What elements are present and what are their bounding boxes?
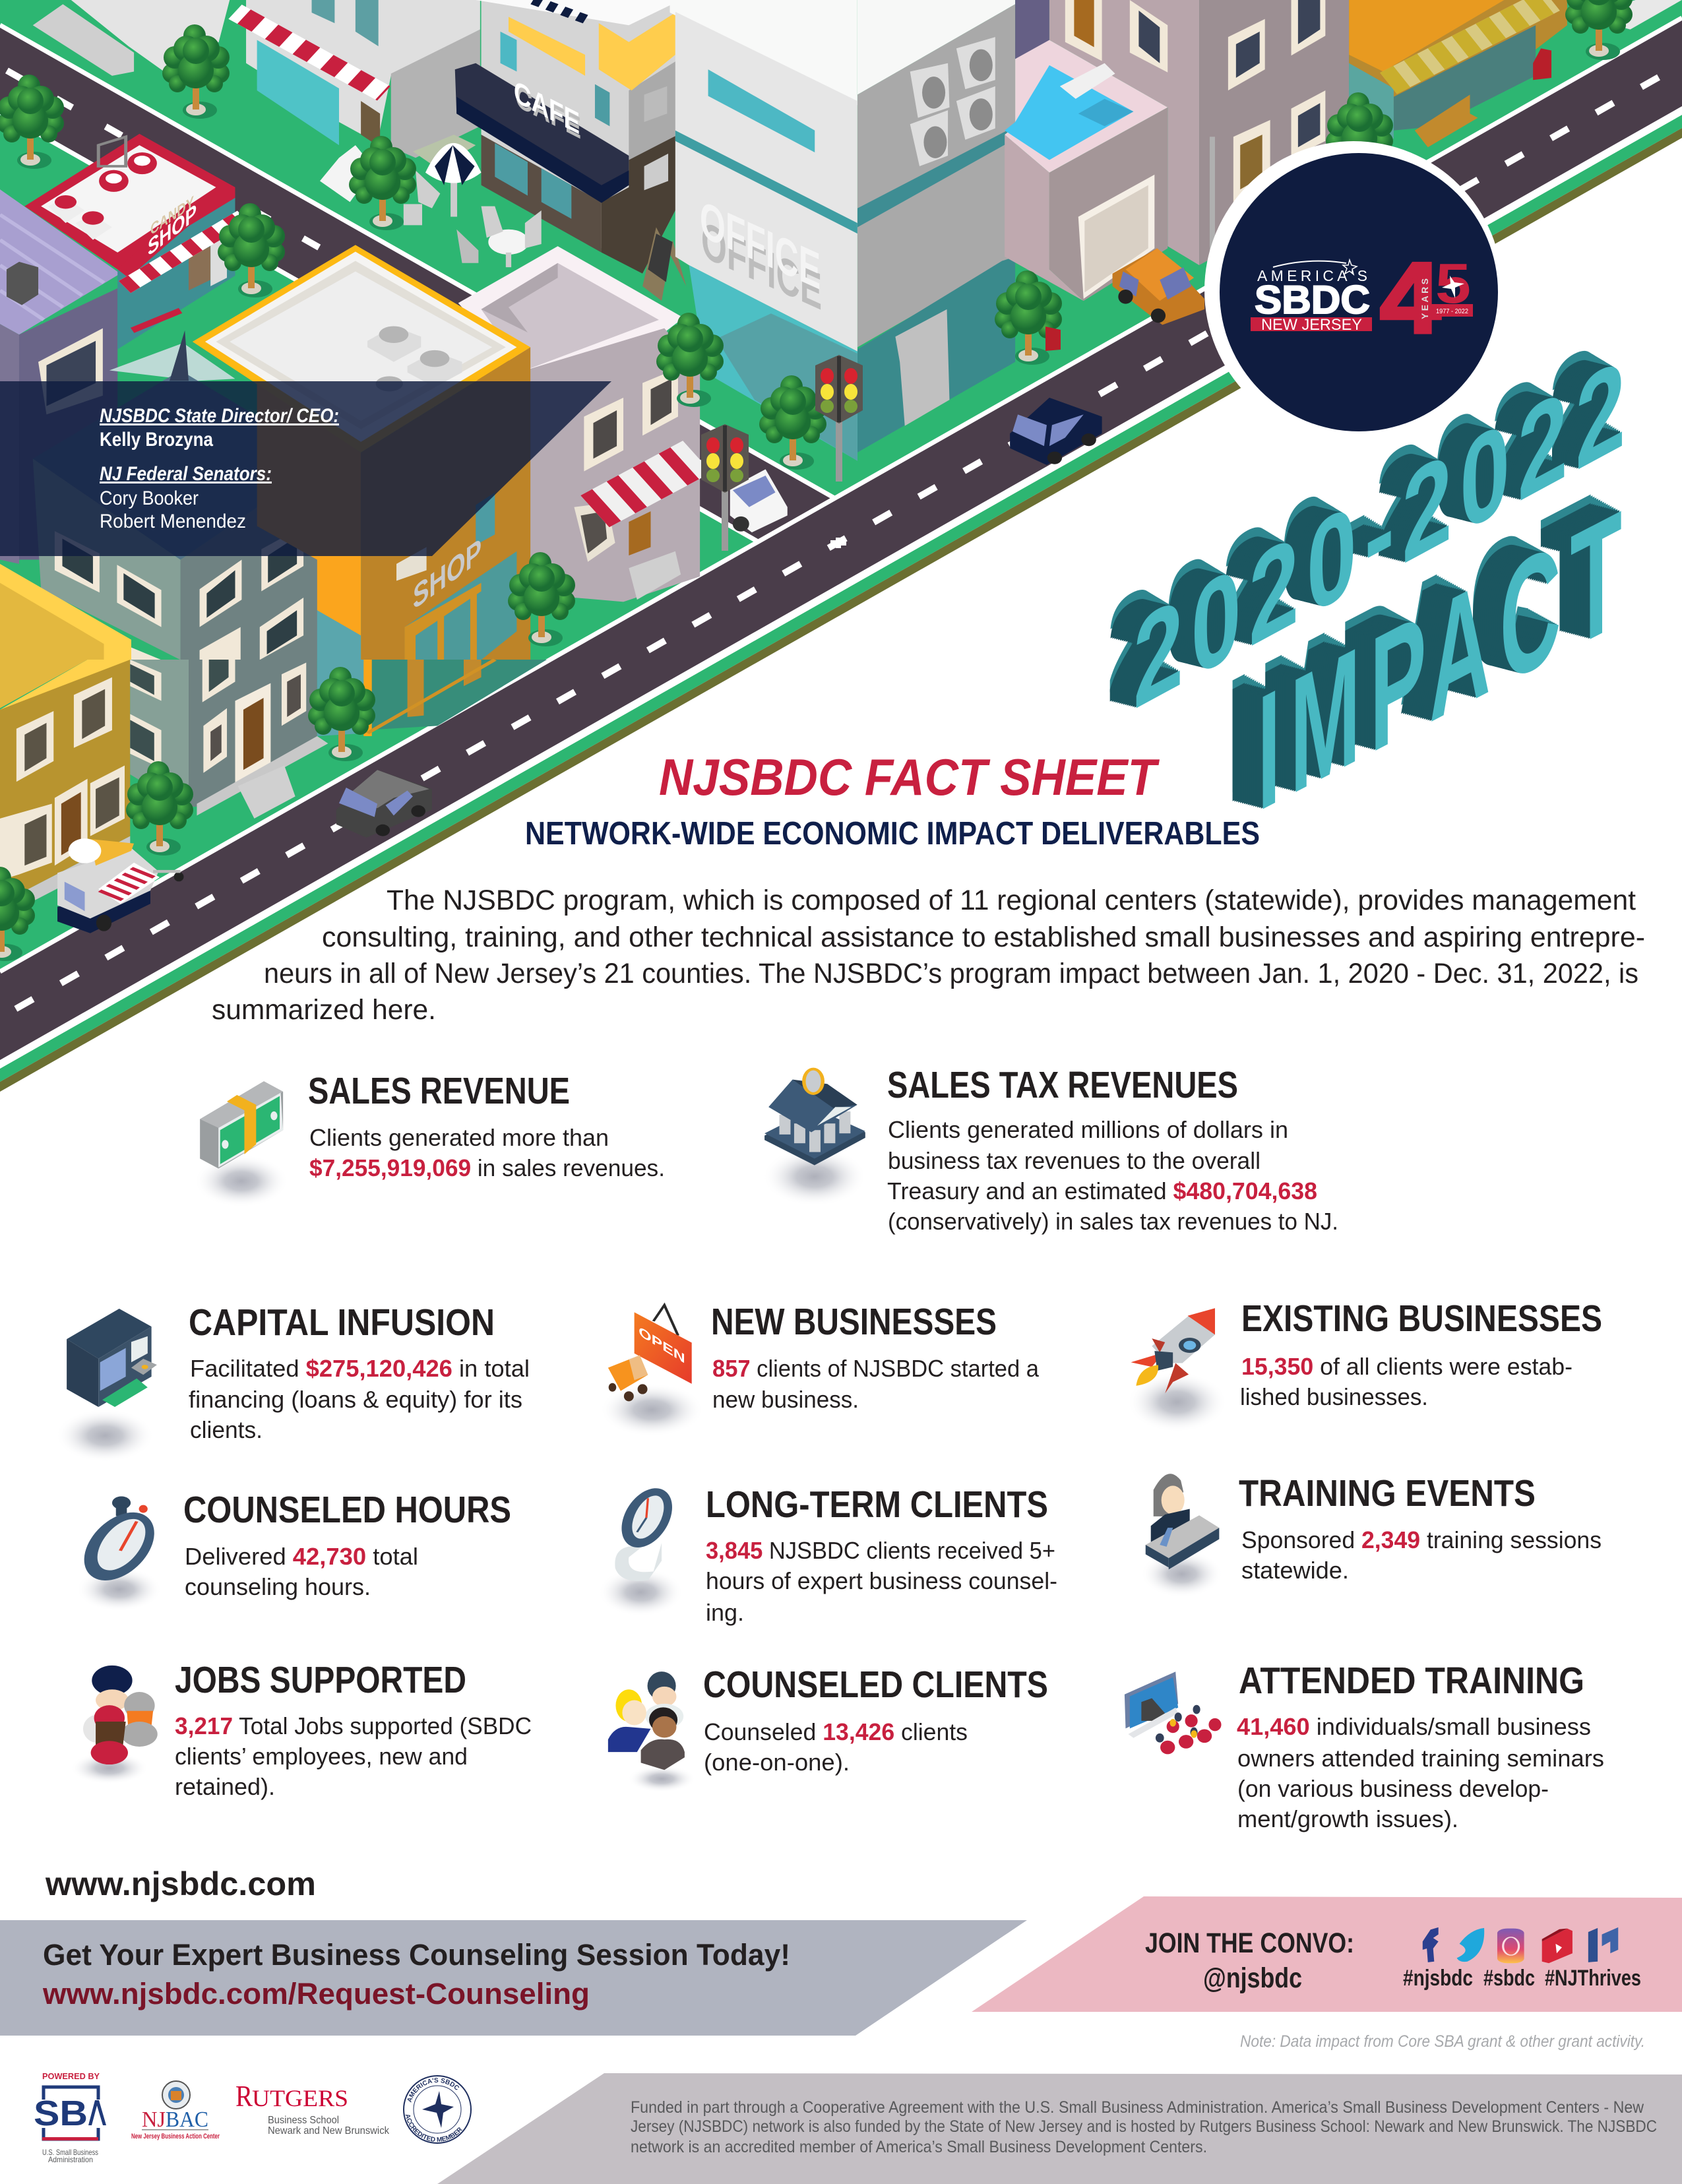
stat: sales tax revenues — [763, 1064, 1338, 1235]
icon: open sign and cart: OPEN — [639, 1323, 685, 1367]
stat: long-term clients: ing. — [706, 1599, 744, 1626]
logo: SBA: U.S. Small Business — [42, 2148, 98, 2157]
logo: Rutgers: UTGERS — [252, 2085, 348, 2111]
stat: counseled hours: counseling hours. — [185, 1573, 371, 1600]
stat: jobs supported: 3,217 Total Jobs supported (SBDC — [175, 1712, 532, 1739]
body: $7,255,919,069 in sales revenues. — [309, 1154, 665, 1181]
stat: counseled clients: Counseled 13,426 clients — [704, 1718, 968, 1745]
banner: request counseling: www.njsbdc.com/Request-Counseling — [42, 1977, 590, 2011]
stat: capital infusion: Facilitated $275,120,426 in total — [190, 1355, 530, 1382]
stat: counseled clients — [703, 1664, 1048, 1776]
3D heading: 2020-2022: 2020-2022 — [1133, 327, 1633, 737]
intro paragraph: summarized here. — [212, 994, 436, 1026]
body: Treasury and an estimated $480,704,638 — [887, 1177, 1317, 1204]
icon: stack of cash — [194, 1081, 288, 1207]
yellow building facade — [0, 660, 130, 914]
subtitle: NETWORK-WIDE ECONOMIC IMPACT DELIVERABLES — [525, 816, 1260, 852]
logo: NJBAC: New Jersey Business Action Center — [131, 2133, 220, 2140]
office side wall — [857, 0, 1015, 452]
banner: join the convo: #sbdc — [1483, 1966, 1535, 1991]
logo: America's SBDC New Jersey 45 years badge: 4 — [1380, 242, 1441, 354]
stat: attended training: ment/growth issues). — [1237, 1805, 1458, 1832]
building signs: OFFICE — [701, 210, 822, 322]
buildings traced lower-left (scaled coordinates) — [0, 660, 547, 933]
banner: join the convo: #NJThrives — [1545, 1966, 1641, 1991]
logo: accredited member seal — [403, 2075, 472, 2144]
banner: request counseling — [0, 1920, 1027, 2036]
building signs: OFFICE — [700, 189, 821, 301]
stat: jobs supported: JOBS SUPPORTED — [175, 1659, 466, 1701]
logo: America's SBDC New Jersey 45 years badge: YEARS — [1419, 278, 1430, 319]
traffic lights — [701, 355, 863, 551]
stat: training events: Sponsored 2,349 training sessions — [1241, 1526, 1602, 1553]
building signs: SHOP — [413, 530, 482, 617]
dark car — [336, 770, 432, 838]
stat: capital infusion — [189, 1301, 530, 1443]
heading: SALES TAX REVENUES — [887, 1064, 1238, 1106]
banner: join the convo: JOIN THE CONVO: — [1145, 1927, 1354, 1959]
intro paragraph: The NJSBDC program, which is composed of 11 regional centers (statewide), provides management — [387, 885, 1636, 916]
ground: green blocks — [0, 0, 1682, 972]
stat: new businesses: 857 clients of NJSBDC started a — [712, 1355, 1040, 1382]
stat: attended training — [1237, 1660, 1604, 1832]
logo: Rutgers — [235, 2079, 390, 2137]
icon: clock with arrow — [598, 1485, 683, 1617]
isometric city illustration — [0, 0, 1682, 1092]
stat: new businesses: NEW BUSINESSES — [711, 1301, 997, 1343]
intro paragraph — [212, 885, 1645, 1026]
road: main diagonal road with kerbs — [0, 18, 1682, 1092]
stat: long-term clients: LONG-TERM CLIENTS — [706, 1483, 1048, 1526]
panel: funding statement — [437, 2073, 1682, 2184]
building signs: CAFE — [514, 75, 580, 141]
banner: request counseling: Get Your Expert Business Counseling Session Today! — [43, 1938, 790, 1972]
stat: existing businesses: lished businesses. — [1240, 1383, 1428, 1410]
logo: America's SBDC New Jersey 45 years badge — [1204, 141, 1503, 439]
panel: funding statement: network is an accredited member of America’s Small Business Development Centers. — [631, 2138, 1207, 2156]
logo: Rutgers: R — [235, 2079, 253, 2113]
panel: leadership overlay: Kelly Brozyna — [100, 429, 213, 451]
3D heading: IMPACT: IMPACT — [1257, 471, 1631, 847]
icon: trainer at podium — [1141, 1474, 1223, 1598]
stat: training events: statewide. — [1241, 1557, 1349, 1584]
building signs: CAFE — [515, 79, 581, 146]
panel: leadership overlay: Robert Menendez — [100, 511, 246, 532]
logo: America's SBDC New Jersey 45 years badge: AMERICA'S — [1257, 267, 1367, 284]
cafe building — [455, 0, 686, 301]
logo: SBA: POWERED BY — [42, 2071, 100, 2081]
candy shop — [24, 134, 243, 350]
stat: new businesses — [711, 1301, 1040, 1413]
buildings traced upper-right (scaled coordinates) — [857, 0, 1682, 465]
street trees — [0, 0, 1633, 961]
purple building — [0, 189, 120, 564]
stat: jobs supported: clients’ employees, new and — [175, 1743, 468, 1770]
banner: join the convo: @njsbdc — [1203, 1962, 1302, 1994]
stat: existing businesses: EXISTING BUSINESSES — [1241, 1297, 1602, 1340]
stat: jobs supported: retained). — [175, 1773, 275, 1800]
yellow building roof — [0, 564, 131, 660]
orange building with yellow awning — [1349, 0, 1682, 147]
patio with parasol and chairs — [404, 135, 542, 267]
stat: counseled clients: (one-on-one). — [704, 1749, 850, 1776]
logo: accredited member seal: ACCREDITED MEMBER — [405, 2115, 463, 2142]
white shop with red awning — [235, 0, 480, 202]
logo: America's SBDC New Jersey 45 years badge: NEW JERSEY — [1261, 316, 1362, 334]
logo: SBA: Administration — [48, 2155, 93, 2164]
icons: social media — [1423, 1927, 1618, 1963]
stat: training events — [1239, 1472, 1602, 1584]
logo: NJBAC: NJ — [142, 2107, 166, 2132]
body: Clients generated millions of dollars in — [888, 1116, 1288, 1143]
banner: join the convo: #njsbdc — [1403, 1966, 1473, 1991]
stat: counseled clients: COUNSELED CLIENTS — [703, 1664, 1048, 1706]
stat: attended training: ATTENDED TRAINING — [1239, 1660, 1584, 1702]
stat: counseled hours: COUNSELED HOURS — [183, 1489, 511, 1531]
title: NJSBDC fact sheet: NJSBDC FACT SHEET — [659, 748, 1160, 806]
office building front — [670, 0, 857, 461]
ice cream truck — [57, 838, 184, 933]
stat: attended training: owners attended training seminars — [1237, 1745, 1604, 1772]
stat: attended training: 41,460 individuals/small business — [1237, 1713, 1591, 1740]
stat: existing businesses: 15,350 of all clients were estab- — [1241, 1353, 1573, 1380]
buildings traced upper-left (scaled coordinates) — [0, 0, 857, 660]
glass shopfront — [317, 660, 547, 736]
grey-green building facade — [130, 660, 328, 819]
stat: capital infusion: CAPITAL INFUSION — [189, 1301, 495, 1344]
stat: jobs supported — [175, 1659, 532, 1800]
icon: rocket — [1127, 1308, 1227, 1433]
panel: leadership overlay — [0, 381, 611, 556]
stat: capital infusion: financing (loans & equity) for its — [189, 1386, 522, 1413]
stat: capital infusion: clients. — [190, 1416, 263, 1443]
logo: SBA: SB — [34, 2094, 88, 2133]
logo: America's SBDC New Jersey 45 years badge: 5 — [1435, 253, 1471, 315]
pink tower with pool — [1005, 0, 1349, 301]
heading: SALES REVENUE — [308, 1070, 570, 1112]
body: business tax revenues to the overall — [888, 1147, 1261, 1174]
navy car — [1010, 398, 1102, 465]
icon: bank with coin — [763, 1068, 867, 1206]
grey-green building roof and side — [33, 330, 328, 660]
intro paragraph: consulting, training, and other technical assistance to established small businesses and aspiring entrepre- — [322, 921, 1645, 953]
stat: long-term clients: hours of expert business counsel- — [706, 1567, 1057, 1594]
yellow-trimmed shop building — [193, 245, 530, 660]
stat: long-term clients — [706, 1483, 1057, 1626]
stat icons, right column — [1125, 1308, 1227, 1754]
icon: stopwatch — [71, 1497, 168, 1611]
stat: existing businesses — [1240, 1297, 1602, 1410]
icon: seminar audience — [1125, 1671, 1222, 1754]
intro paragraph: neurs in all of New Jersey’s 21 counties. The NJSBDC’s program impact between Jan. 1, 2020 - Dec. 31, 2022, is — [264, 958, 1638, 989]
note: Note: Data impact from Core SBA grant & other grant activity. — [1240, 2032, 1645, 2051]
road: side street — [0, 25, 834, 542]
stat: new businesses: new business. — [712, 1386, 859, 1413]
panel: leadership overlay: Cory Booker — [100, 487, 199, 509]
icon: workers group — [70, 1666, 158, 1784]
logo: America's SBDC New Jersey 45 years badge: SBDC — [1255, 278, 1370, 322]
logo: accredited member seal: AMERICA'S SBDC — [408, 2078, 459, 2103]
icon: safe with cash — [56, 1309, 157, 1462]
body — [887, 1116, 1338, 1235]
body — [309, 1124, 665, 1181]
logo: Rutgers: Newark and New Brunswick — [268, 2125, 390, 2137]
stat: attended training: (on various business develop- — [1237, 1775, 1549, 1802]
hydrant — [1045, 327, 1061, 351]
stat: training events: TRAINING EVENTS — [1239, 1472, 1536, 1514]
body: Clients generated more than — [309, 1124, 609, 1151]
icon: open sign and cart — [600, 1305, 704, 1437]
white delivery van — [730, 469, 788, 532]
banner: join the convo — [972, 1896, 1682, 2012]
logo: NJBAC — [131, 2081, 220, 2140]
link: website: www.njsbdc.com — [45, 1865, 316, 1902]
panel: leadership overlay: NJ Federal Senators: — [100, 463, 272, 485]
orange car — [1113, 248, 1204, 325]
lavender building — [458, 246, 700, 602]
stat: sales revenue — [194, 1070, 665, 1207]
logo: Rutgers: Business School — [268, 2115, 339, 2126]
body: (conservatively) in sales tax revenues to NJ. — [888, 1208, 1338, 1235]
logo: America's SBDC New Jersey 45 years badge: 1977 - 2022 — [1436, 308, 1468, 315]
stat: counseled hours — [183, 1489, 511, 1600]
building signs — [148, 75, 822, 617]
stat: long-term clients: 3,845 NJSBDC clients received 5+ — [706, 1537, 1055, 1564]
logo: SBA — [34, 2071, 106, 2164]
building signs: CANDY — [150, 192, 194, 239]
icon: three clients — [608, 1671, 695, 1792]
stat icons, left and middle columns — [56, 1305, 704, 1792]
panel: leadership overlay: NJSBDC State Director/ CEO: — [100, 405, 339, 427]
logo: NJBAC: BAC — [166, 2107, 208, 2132]
building signs: SHOP — [148, 199, 197, 262]
stat: counseled hours: Delivered 42,730 total — [185, 1543, 418, 1570]
